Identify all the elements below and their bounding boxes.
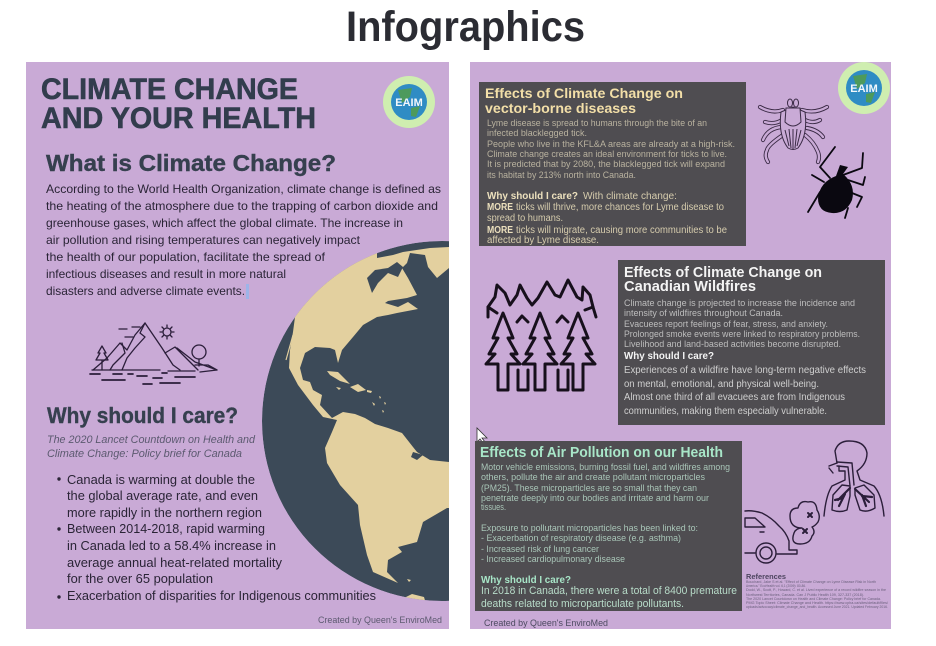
text block: [487, 118, 735, 180]
bullet list: Canada is warming at double the: [67, 473, 255, 487]
text block: Exposure to pollutant microparticles has been linked to:: [481, 523, 698, 533]
globe illustration: [262, 241, 449, 601]
references: Northwest Territories, Canada. Can J Public Health 109, 327-337 (2018).: [746, 593, 864, 597]
heading: [624, 265, 822, 295]
text block: [624, 298, 860, 349]
logo: EAIM: EAIM: [395, 97, 423, 109]
why should I care: [624, 351, 866, 417]
why should I care: Why should I care?: [487, 191, 578, 202]
icon: mouse cursor: [477, 428, 487, 443]
why should I care: [487, 191, 727, 246]
bullet list: for the over 65 population: [67, 572, 213, 586]
why should I care: Why should I care?: [481, 574, 571, 586]
references: Dodd, W., Scott, P., Howard, C. et al. Lived experience of a record wildfire season in the: [746, 588, 886, 592]
logo: EAIM: [838, 62, 890, 114]
text block: It is predicted that by 2080, the blacklegged tick will expand: [487, 159, 725, 169]
text block: Evacuees report feelings of fear, stress, and anxiety.: [624, 319, 828, 329]
text block: People who live in the KFL&A areas are already at a high-risk.: [487, 139, 735, 149]
references: America." EcoHealth vol. 6,1 (2009): 80-86.: [746, 584, 806, 588]
icon: burning forest: [486, 280, 596, 390]
text block: (PM25). These microparticles are so small that they can: [481, 483, 697, 493]
text cursor highlight: [246, 284, 249, 299]
why should I care: In 2018 in Canada, there were a total of 8400 premature: [481, 585, 737, 597]
why should I care: [481, 574, 737, 610]
why should I care: Almost one third of all evacuees are from Indigenous: [624, 392, 845, 403]
text block: climate change definition: According to the World Health Organization, climate change is defined as: [46, 182, 441, 196]
logo: EAIM: [383, 76, 435, 128]
heading: Effects of Air Pollution on our Health: [480, 444, 723, 461]
references: The 2020 Lancet Countdown on Health and Climate Change: Policy brief for Canada.: [746, 597, 881, 601]
panel: air pollution: [475, 441, 742, 611]
text block: Motor vehicle emissions, burning fossil fuel, and wildfires among: [481, 462, 730, 472]
text block: climate change definition: air pollution and rising temperatures can negatively impact: [46, 233, 361, 247]
bullet list: Between 2014-2018, rapid warming: [67, 522, 265, 536]
text block: climate change definition: [46, 182, 441, 298]
heading: climate change and your health: [41, 73, 316, 135]
panel: vector-borne diseases: [479, 82, 746, 246]
bullet list: the global average rate, and even: [67, 489, 258, 503]
heading: why should I care: Why should I care?: [47, 403, 238, 428]
text block: infected blacklegged tick.: [487, 128, 587, 138]
why should I care: spread to humans.: [487, 213, 563, 224]
heading: [485, 85, 683, 116]
text block: Climate change creates an ideal environment for ticks to live.: [487, 149, 727, 159]
panel: climate change and your health: [26, 62, 449, 629]
bullet list: in Canada led to a 58.4% increase in: [67, 539, 276, 553]
heading: vector-borne diseases: [485, 100, 636, 116]
why should I care: Why should I care?: [624, 351, 714, 362]
heading: what is climate change: What is Climate Change?: [46, 150, 336, 176]
why should I care: MORE: [487, 202, 513, 213]
text block: - Exacerbation of respiratory disease (e.g. asthma): [481, 533, 681, 543]
text block: - Increased cardiopulmonary disease: [481, 554, 625, 564]
icon: lungs: [824, 441, 884, 516]
icon: tick silhouette: [808, 147, 865, 218]
heading: Canadian Wildfires: [624, 279, 756, 295]
why should I care: Experiences of a wildfire have long-term negative effects: [624, 365, 866, 376]
title: Infographics: [346, 3, 585, 51]
why should I care: ticks will migrate, causing more communities to be: [516, 225, 727, 236]
text block: Prolonged smoke events were linked to respiratory problems.: [624, 329, 860, 339]
text block: lancet citation: The 2020 Lancet Countdown on Health and: [47, 434, 256, 446]
text block: climate change definition: greenhouse gases, which affect the global climate. The increase in: [46, 216, 403, 230]
logo: EAIM: EAIM: [850, 83, 878, 95]
text block: climate change definition: infectious diseases and result in more natural: [46, 267, 286, 281]
text block: [481, 462, 730, 564]
text block: penetrate deeply into our bodies and irritate and harm our: [481, 493, 709, 503]
icon: tick outline: [760, 99, 827, 162]
heading: Effects of Climate Change on: [485, 85, 683, 101]
references: uploads/advocacy/climate_change_and_health. Accessed June 2021. Updated February 2016.: [746, 605, 888, 609]
why should I care: affected by Lyme disease.: [487, 235, 599, 246]
bullet list: Exacerbation of disparities for Indigenous communities: [67, 589, 376, 603]
heading: climate change and your health: AND YOUR HEALTH: [41, 102, 316, 135]
references: PMG Topic Sheet: Climate Change and Health. https://www.cpha.ca/sites/default/files/: [746, 601, 888, 605]
text block: - Increased risk of lung cancer: [481, 544, 599, 554]
panel: effects: [470, 62, 891, 629]
why should I care: ticks will thrive, more chances for Lyme disease to: [516, 202, 724, 213]
bullet list: more rapidly in the northern region: [67, 506, 262, 520]
why should I care: With climate change:: [583, 191, 677, 202]
text block: lancet citation: [47, 434, 256, 460]
text block: its habitat by 213% north into Canada.: [487, 170, 636, 180]
references: References: [746, 572, 786, 581]
text block: climate change definition: the heating of the atmosphere due to the trapping of carbon dioxide and: [46, 199, 438, 213]
panel: canadian wildfires: [618, 260, 885, 425]
credit: Created by Queen's EnviroMed: [484, 618, 608, 629]
text block: Lyme disease is spread to humans through the bite of an: [487, 118, 707, 128]
icon: car with exhaust: [745, 502, 819, 563]
heading: Effects of Climate Change on: [624, 265, 822, 281]
text block: others, pollute the air and create pollutant microparticles: [481, 472, 705, 482]
heading: climate change and your health: CLIMATE CHANGE: [41, 73, 298, 106]
references: [746, 572, 888, 609]
why should I care: communities, making them especially vulnerable.: [624, 406, 827, 417]
icon: mountains: [90, 323, 217, 384]
references: Bouchard, Jake S et al. "Effect of Climate Change on Lyme Disease Risk in North: [746, 580, 876, 584]
credit: Created by Queen's EnviroMed: [318, 615, 442, 626]
why should I care: on mental, emotional, and physical well-being.: [624, 379, 819, 390]
text block: Climate change is projected to increase the incidence and: [624, 298, 855, 308]
text block: lancet citation: Climate Change: Policy brief for Canada: [47, 448, 242, 460]
text block: Livelihood and land-based activities become disrupted.: [624, 339, 841, 349]
text block: intensity of wildfires throughout Canada.: [624, 308, 783, 318]
why should I care: deaths related to microparticulate pollutants.: [481, 598, 684, 610]
text block: tissues.: [481, 502, 506, 512]
bullet list: [57, 473, 376, 603]
text block: climate change definition: the health of our population, facilitate the spread of: [46, 250, 326, 264]
text block: climate change definition: disasters and adverse climate events.: [46, 284, 245, 298]
why should I care: MORE: [487, 225, 513, 236]
bullet list: average annual heat-related mortality: [67, 556, 283, 570]
